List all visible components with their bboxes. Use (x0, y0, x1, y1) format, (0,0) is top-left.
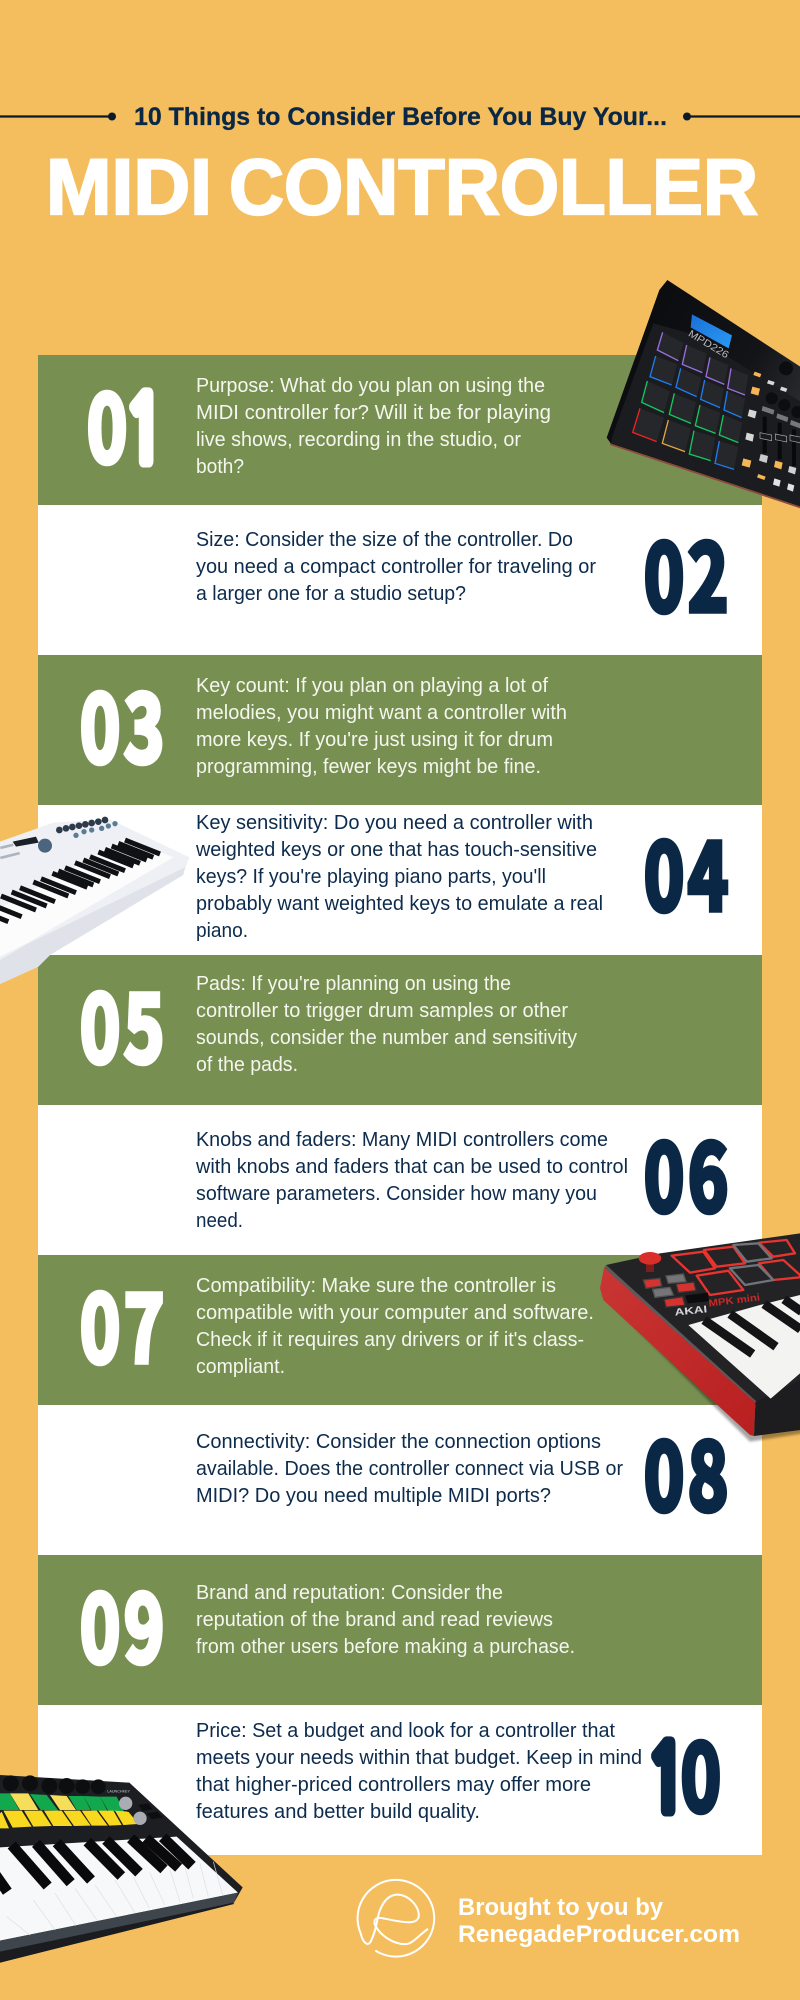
panel: item 06 knobs and faders: with knobs and faders that can be used to control (195, 1156, 628, 1178)
footer: credit: RenegadeProducer.com (458, 1921, 740, 1948)
image: MPD226 pad controller (607, 280, 800, 509)
panel: item 03 key count: 03 (80, 656, 164, 789)
panel: item 04 key sensitivity: weighted keys or one that has touch-sensitive (195, 839, 597, 861)
title: MIDI (46, 142, 212, 231)
panel: item 07 compatibility: 07 (80, 1256, 164, 1389)
panel: item 01 purpose: 0 (87, 356, 127, 489)
keys (688, 1295, 800, 1399)
black keys (0, 1837, 192, 1892)
panel: item 01 purpose (38, 355, 762, 505)
image: white MIDI keyboard (0, 817, 189, 984)
panel: item 08 connectivity: Connectivity: Consider the connection options (196, 1431, 601, 1453)
panel: item 04 key sensitivity: keys? If you're playing piano parts, you'll (196, 866, 546, 888)
panel: item 10 price: that higher-priced controllers may offer more (196, 1774, 591, 1796)
panel: item 07 compatibility: Check if it requires any drivers or if it's class- (196, 1329, 584, 1351)
front lip (0, 867, 185, 984)
knob rows (56, 817, 108, 833)
pads (672, 1240, 800, 1295)
joystick (639, 1252, 661, 1272)
panel: item 09 brand and reputation (38, 1555, 762, 1705)
credit text: Brought to you by (458, 1894, 664, 1921)
panel: item 05 pads: of the pads. (196, 1054, 298, 1076)
panel: item 09 brand and reputation: reputation of the brand and read reviews (196, 1609, 553, 1631)
pad grid (633, 332, 748, 469)
small buttons (0, 843, 20, 859)
panel: item 10 price: meets your needs within that budget. Keep in mind (196, 1747, 642, 1769)
panel: item 03 key count: Key count: If you plan on playing a lot of (196, 675, 548, 697)
panel: item 07 compatibility: compliant. (196, 1356, 285, 1378)
panel: item 06 knobs and faders: 06 (644, 1105, 728, 1238)
panel: item 05 pads: 05 (80, 956, 164, 1089)
panel: item 05 pads: sounds, consider the number and sensitivity (196, 1027, 577, 1049)
screen (13, 837, 39, 847)
panel: item 04 key sensitivity (38, 804, 762, 955)
panel: item 06 knobs and faders: need. (196, 1210, 243, 1232)
model label: MPD226 (686, 328, 731, 361)
main knob (38, 839, 52, 853)
panel: item 06 knobs and faders: Knobs and faders: Many MIDI controllers come (196, 1129, 608, 1151)
panel: item 08 connectivity: 08 (644, 1404, 728, 1537)
panel: item 09 brand and reputation: Brand and reputation: Consider the (196, 1582, 503, 1604)
white key dividers (7, 1862, 223, 1935)
green pads (0, 1793, 124, 1812)
knobs (3, 1775, 106, 1794)
panel: item 01 purpose: Purpose: What do you plan on using the (196, 375, 545, 397)
title: CONTROLLER (229, 142, 758, 231)
panel: item 07 compatibility: Compatibility: Make sure the controller is (196, 1275, 556, 1297)
panel: item 05 pads (38, 955, 762, 1105)
image: red MPK mini: MPK mini (708, 1292, 761, 1310)
header: subtitle with rules: 10 Things to Consider Before You Buy Your... (134, 103, 667, 131)
panel: item 02 size (38, 505, 762, 655)
panel: item 08 connectivity: available. Does the controller connect via USB or (196, 1458, 623, 1480)
panel: item 04 key sensitivity: Key sensitivity: Do you need a controller with (196, 812, 593, 834)
panel: item 01 purpose: both? (196, 456, 244, 478)
panel: item 02 size: 02 (644, 505, 728, 638)
panel: item 10 price: Price: Set a budget and look for a controller that (196, 1720, 615, 1742)
panel: item 02 size: a larger one for a studio setup? (196, 583, 466, 605)
panel: item 10 price: 1 (646, 1735, 687, 1826)
panel: item 05 pads: Pads: If you're planning on using the (196, 973, 511, 995)
knobs (766, 361, 800, 418)
icon: renegade producer logo (358, 1880, 434, 1957)
panel: item 03 key count (38, 655, 762, 805)
panel: item 08 connectivity (38, 1404, 762, 1555)
front lip (0, 1893, 238, 1963)
panel: item 09 brand and reputation: 09 (80, 1556, 164, 1689)
black keys (0, 840, 160, 922)
panel: item 06 knobs and faders: software parameters. Consider how many you (196, 1183, 597, 1205)
panel: item 03 key count: more keys. If you're just using it for drum (196, 729, 553, 751)
panel: item 10 price (38, 1705, 762, 1855)
panel: item 04 key sensitivity: probably want weighted keys to emulate a real (196, 893, 603, 915)
panel: item 07 compatibility: compatible with your computer and software. (196, 1302, 594, 1324)
panel: item 09 brand and reputation: from other users before making a purchase. (196, 1636, 575, 1658)
image: red MPK mini (600, 1233, 800, 1442)
image: Launchkey keyboard (0, 1775, 243, 1963)
footer: credit (358, 1880, 740, 1957)
panel: item 01 purpose: 1 (124, 386, 165, 477)
panel: item 08 connectivity: MIDI? Do you need multiple MIDI ports? (196, 1485, 551, 1507)
yellow pads (0, 1811, 138, 1828)
panel: item 05 pads: controller to trigger drum samples or other (196, 1000, 568, 1022)
panel: item 10 price: features and better build quality. (196, 1801, 480, 1823)
lcd screen (691, 314, 732, 348)
red side (600, 1268, 755, 1436)
transport buttons (643, 1274, 708, 1307)
panel: item 03 key count: melodies, you might want a controller with (196, 702, 567, 724)
header: subtitle with rules (0, 103, 800, 131)
model label: LAUNCHKEY (107, 1790, 131, 1794)
panel: item 10 price: 0 (681, 1705, 721, 1838)
panel: item 02 size: you need a compact controller for traveling or (196, 556, 596, 578)
chassis top (606, 1233, 800, 1403)
panel: item 04 key sensitivity: 04 (644, 804, 728, 937)
panel: item 01 purpose: MIDI controller for? Will it be for playing (196, 402, 551, 424)
panel: item 03 key count: programming, fewer keys might be fine. (196, 756, 541, 778)
white keys (0, 1837, 238, 1941)
panel: item 01 purpose: live shows, recording in the studio, or (196, 429, 521, 451)
faders (760, 406, 800, 466)
panel: item 04 key sensitivity: piano. (196, 920, 248, 942)
panel: item 06 knobs and faders (38, 1105, 762, 1255)
brand labels: AKAI (674, 1304, 708, 1319)
side buttons (119, 1797, 163, 1825)
panel: item 02 size: Size: Consider the size of the controller. Do (196, 529, 573, 551)
panel: item 07 compatibility (38, 1255, 762, 1405)
front corner (754, 1380, 800, 1436)
side buttons (742, 372, 796, 492)
